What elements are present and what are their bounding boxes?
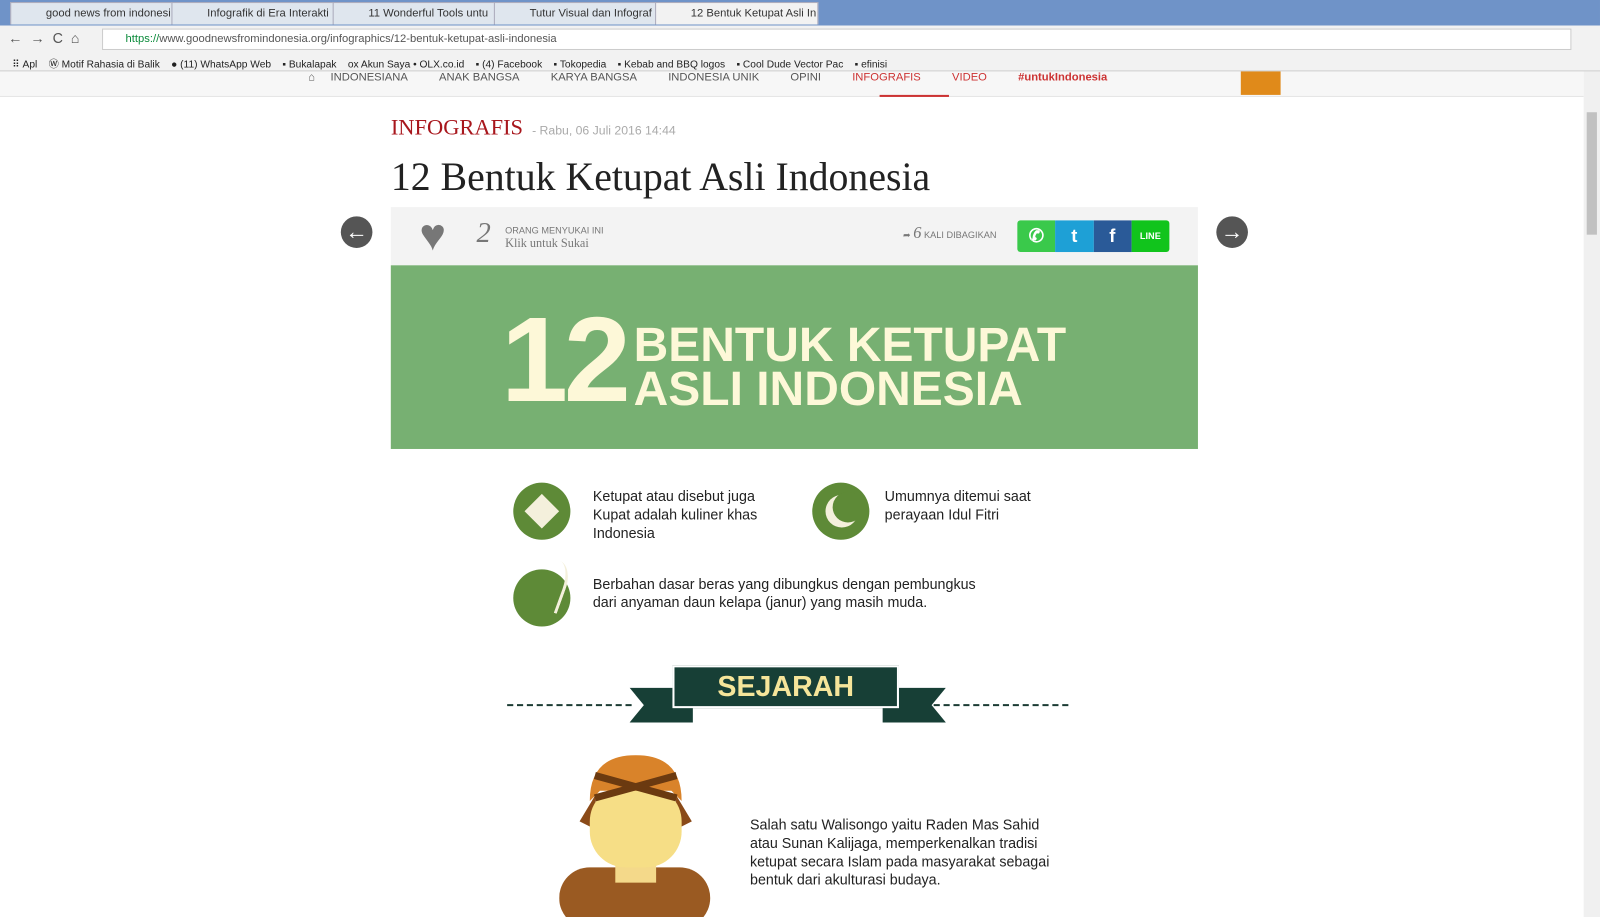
share buttons: ✆ xyxy=(1029,226,1044,246)
fact 1: Ketupat atau disebut juga Kupat adalah kuliner khas Indonesia xyxy=(593,488,757,541)
banner: 12 xyxy=(501,293,627,428)
tabs: good news from indonesi xyxy=(46,7,171,19)
like/share bar: Klik untuk Sukai xyxy=(505,236,589,250)
icon: moon xyxy=(812,483,869,540)
share buttons: LINE xyxy=(1140,231,1161,241)
illustration: Sunan Kalijaga xyxy=(559,755,710,917)
title: 12 Bentuk Ketupat Asli Indonesia xyxy=(391,155,930,199)
address bar: https://www.goodnewsfromindonesia.org/infographics/12-bentuk-ketupat-asli-indonesia xyxy=(126,33,557,45)
banner xyxy=(391,265,1198,449)
section banner: sejarah xyxy=(507,665,1068,722)
next arrow xyxy=(1216,216,1248,248)
fact 2 xyxy=(812,482,1031,540)
site nav xyxy=(0,71,1584,97)
heart icon: ♥ xyxy=(419,210,446,260)
fact 2: Umumnya ditemui saat perayaan Idul Fitri xyxy=(885,488,1031,522)
icon: janur leaves xyxy=(513,569,570,627)
browser tab bar: 11 Wonderful Tools untu xyxy=(368,7,488,19)
prev arrow: ← xyxy=(345,218,368,244)
fact 3: Berbahan dasar beras yang dibungkus dengan pembungkus dari anyaman daun kelapa (janur) yang masih muda. xyxy=(593,576,976,610)
scrollbar xyxy=(1584,71,1600,917)
text: sejarah: Salah satu Walisongo yaitu Raden Mas Sahid atau Sunan Kalijaga, memperkenalkan tradisi ketupat secara Islam pada masyarakat sebagai bentuk dari akulturasi budaya. xyxy=(750,816,1049,888)
share buttons: f xyxy=(1109,226,1115,246)
share buttons: t xyxy=(1071,226,1077,246)
browser tab bar: 12 Bentuk Ketupat Asli In xyxy=(691,7,816,19)
like/share bar: ORANG MENYUKAI INI xyxy=(505,226,604,236)
icon: ketupat xyxy=(513,483,570,540)
fact 3 xyxy=(513,562,976,626)
fact 1 xyxy=(513,482,757,541)
address bar: ← → C ⌂ xyxy=(8,30,79,46)
share buttons xyxy=(1017,220,1170,252)
banner: ASLI INDONESIA xyxy=(634,361,1023,415)
browser tab bar: Infografik di Era Interakti xyxy=(207,7,329,19)
like/share bar xyxy=(391,207,1198,265)
prev arrow xyxy=(341,216,372,248)
bookmarks bar: ⠿ Apl Ⓦ Motif Rahasia di Balik ● (11) WhatsApp Web ▪ Bukalapak ox Akun Saya • OLX.co.id ▪ (4) Facebook ▪ Tokopedia ▪ Kebab and BBQ logos ▪ Cool Dude Vector Pac ▪ efinisi xyxy=(12,59,887,70)
section banner: sejarah: SEJARAH xyxy=(717,670,854,702)
article header: INFOGRAFIS - Rabu, 06 Juli 2016 14:44 xyxy=(391,114,676,140)
bookmarks bar xyxy=(0,52,1600,71)
next arrow: → xyxy=(1221,218,1243,244)
like/share bar: ➦ 6 KALI DIBAGIKAN xyxy=(903,224,997,242)
browser tab bar xyxy=(0,0,1600,26)
browser tab bar: Tutur Visual dan Infograf xyxy=(530,7,652,19)
banner: BENTUK KETUPAT xyxy=(634,317,1066,371)
address bar xyxy=(0,26,1600,52)
like/share bar: 2 xyxy=(477,217,491,249)
site nav: ⌂ INDONESIANA ANAK BANGSA KARYA BANGSA INDONESIA UNIK OPINI INFOGRAFIS VIDEO #untukIndonesia xyxy=(308,71,1107,84)
tabs xyxy=(10,2,173,24)
